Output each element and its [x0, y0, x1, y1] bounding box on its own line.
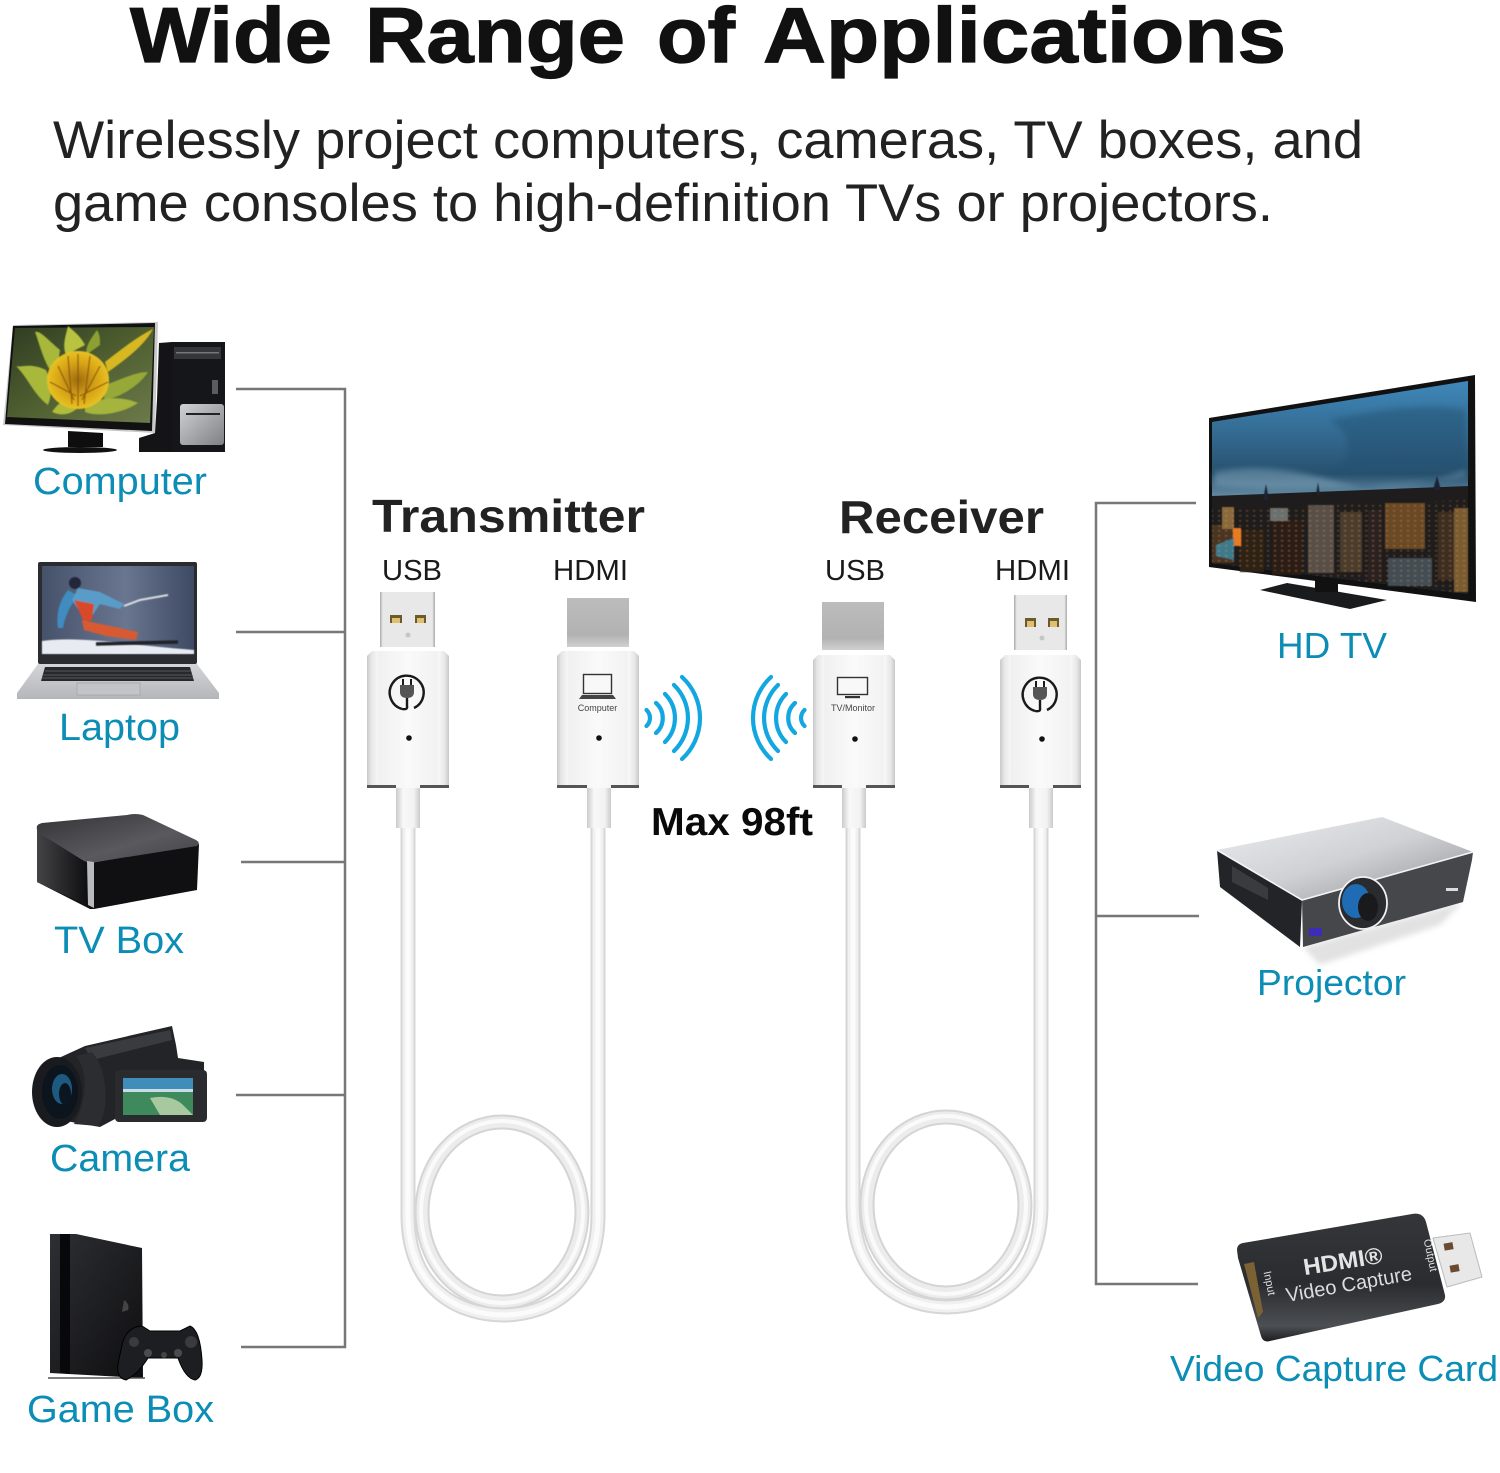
label: Camera: Camera — [50, 1138, 191, 1180]
heading: Receiver: Receiver — [839, 491, 1044, 543]
icon: game console and controller — [48, 1234, 202, 1380]
icon: TV box — [37, 814, 199, 909]
transmitter HDMI plug — [557, 598, 639, 828]
transmitter cable — [408, 828, 598, 1315]
heading: Transmitter: Transmitter — [372, 490, 645, 542]
receiver HDMI plug — [813, 602, 895, 828]
Video Capture text: Video Capture — [1284, 1263, 1414, 1307]
icon: video capture card — [1237, 1214, 1482, 1341]
label: Video Capture Card: Video Capture Card — [1170, 1348, 1498, 1389]
Input text: Input — [1261, 1270, 1277, 1297]
label: HD TV: HD TV — [1277, 625, 1387, 666]
label: Max 98ft: Max 98ft — [651, 801, 813, 844]
port labels — [382, 555, 1070, 587]
label: Game Box: Game Box — [27, 1389, 214, 1431]
right connector lines — [1096, 503, 1199, 1284]
icon: monitor symbol — [838, 678, 868, 698]
label: TV/Monitor symbol caption: TV/Monitor — [831, 703, 875, 713]
port labels: HDMI — [995, 555, 1070, 587]
icon: laptop symbol — [579, 674, 616, 699]
icon: wireless waves transmitter — [646, 677, 700, 759]
icon: wireless waves receiver — [753, 677, 804, 759]
port labels: USB — [825, 555, 885, 587]
left connector lines — [236, 389, 345, 1347]
icon: HD TV — [1209, 375, 1476, 609]
icon: laptop — [17, 562, 219, 699]
label: TV Box: TV Box — [54, 920, 184, 962]
HDMI logo text: HDMI® — [1301, 1242, 1384, 1280]
transmitter USB plug — [367, 592, 449, 828]
title — [130, 0, 1286, 79]
port labels: USB — [382, 555, 442, 587]
label: Laptop: Laptop — [59, 707, 180, 749]
city skyline — [1212, 476, 1468, 594]
label: Computer: Computer — [33, 461, 207, 503]
receiver USB plug — [1000, 595, 1081, 828]
icon: projector — [1217, 817, 1473, 965]
icon: computer — [3, 322, 225, 453]
label: Computer symbol caption: Computer — [578, 703, 617, 713]
receiver cable — [853, 828, 1041, 1307]
subtitle text block: game consoles to high-definition TVs or projectors. — [53, 174, 1273, 233]
label: Projector: Projector — [1257, 962, 1406, 1003]
subtitle text block: Wirelessly project computers, cameras, TV boxes, and — [53, 111, 1363, 170]
Output text: Output — [1421, 1238, 1439, 1273]
icon: camera — [32, 1026, 207, 1127]
port labels: HDMI — [553, 555, 628, 587]
subtitle text block — [53, 111, 1363, 233]
